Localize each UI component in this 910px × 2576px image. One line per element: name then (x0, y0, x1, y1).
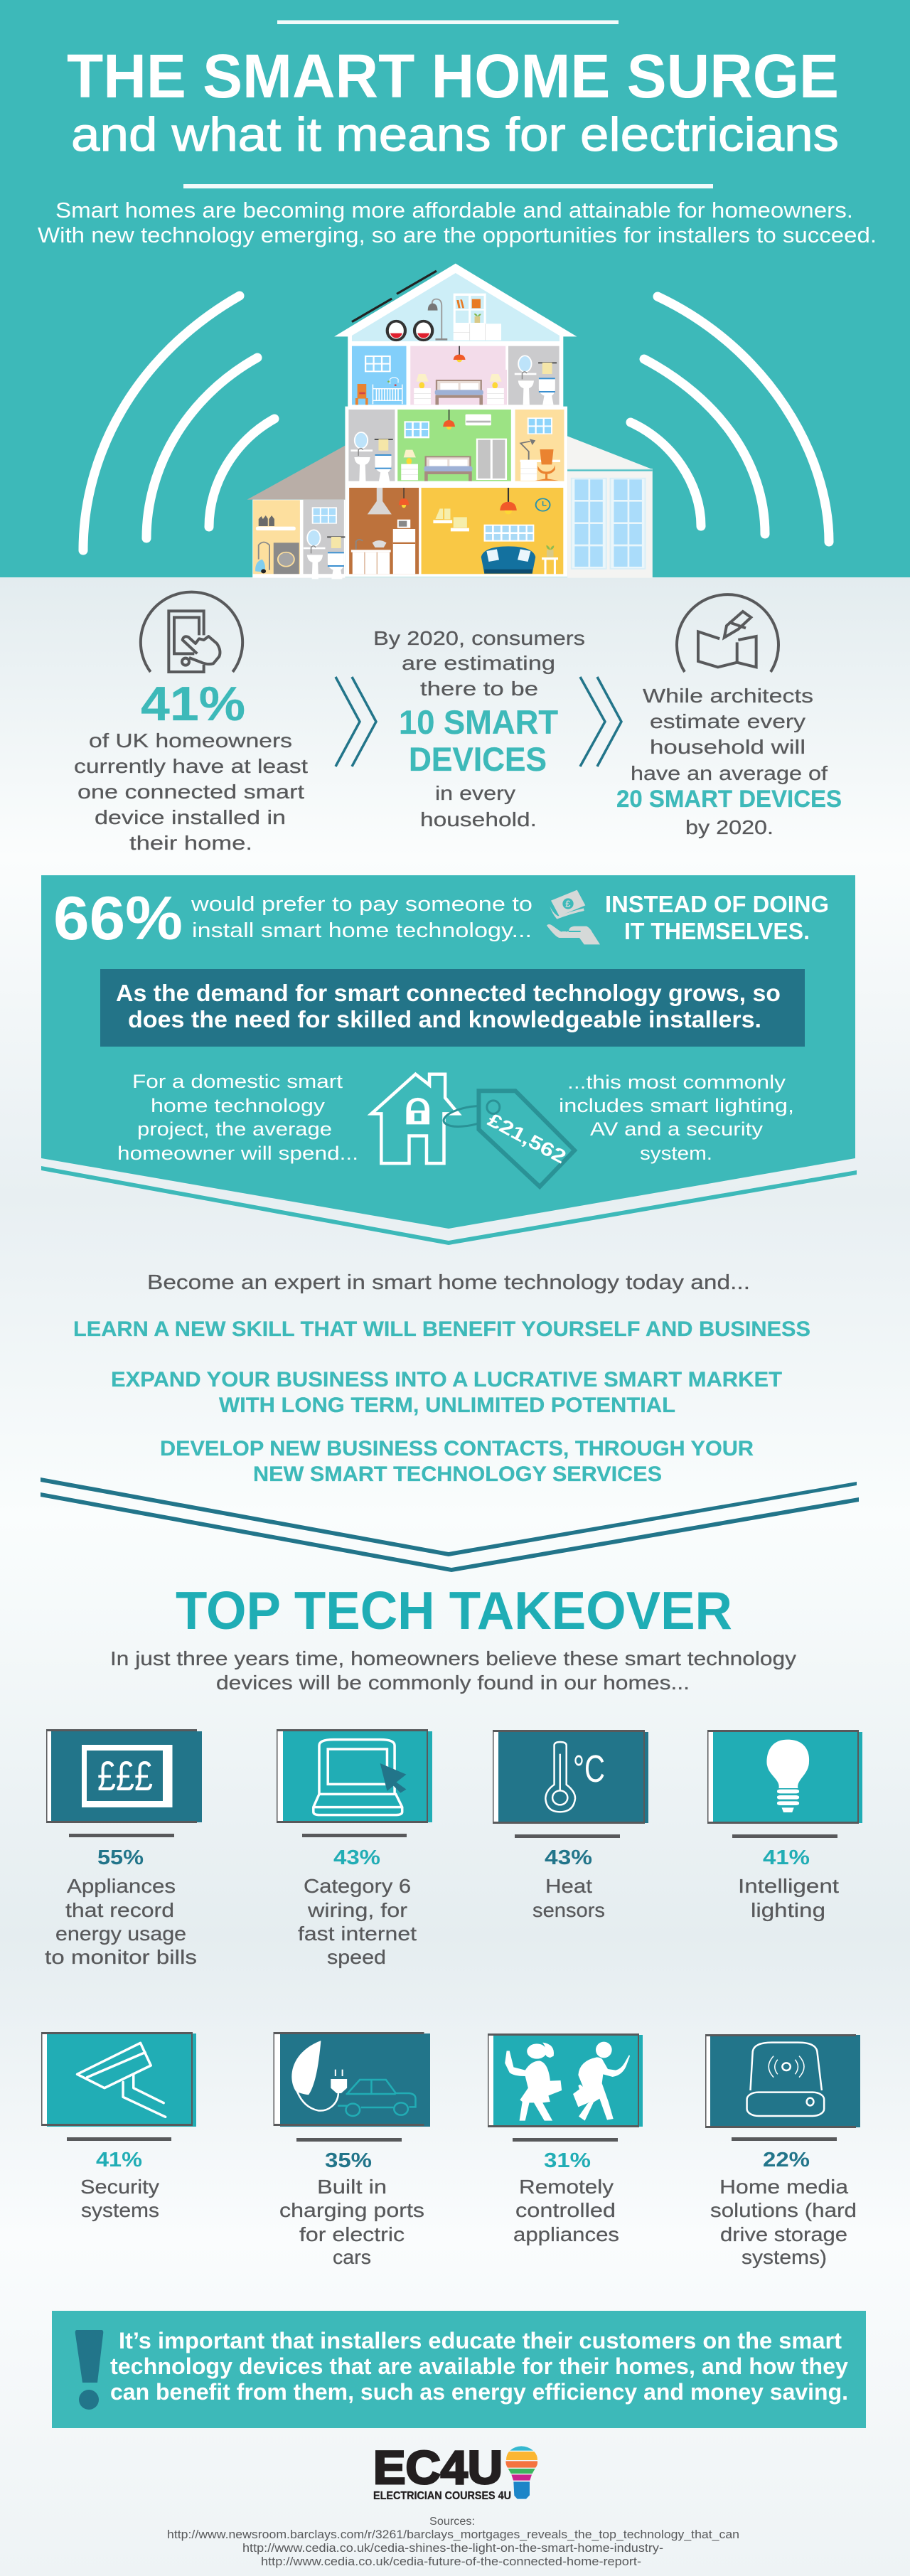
stat: 10 smart devices: there to be (420, 678, 538, 700)
card: 43 percent category 6 wiring: wiring, for (307, 1899, 407, 1921)
illustration: house cross-section (247, 264, 653, 579)
logo: EC4U (373, 2441, 537, 2502)
stat: 41 percent (74, 592, 308, 854)
panel: three statistics (74, 592, 842, 854)
benefit: develop contacts (160, 1437, 754, 1486)
card: 31 percent remotely controlled appliances: 31% (544, 2149, 591, 2172)
stat: 20 smart devices: household will (650, 736, 805, 758)
stat: 10 smart devices: are estimating (402, 652, 555, 674)
icon: money in hand: £ (565, 899, 570, 909)
card: 43 percent category 6 wiring: speed (327, 1946, 386, 1968)
text: top tech intro: devices will be commonly found in our homes... (216, 1672, 690, 1694)
arrow: chevrons one (336, 677, 376, 766)
left extension (247, 446, 345, 500)
benefit: develop contacts: DEVELOP NEW BUSINESS CONTACTS, THROUGH YOUR (160, 1437, 754, 1460)
text: average spend: homeowner will spend... (117, 1143, 358, 1164)
stat: 20 smart devices (616, 594, 842, 838)
text: most commonly includes: ...this most commonly (567, 1071, 786, 1093)
card: 43 percent category 6 wiring: Category 6 (304, 1875, 411, 1897)
benefit: develop contacts: NEW SMART TECHNOLOGY SERVICES (253, 1463, 662, 1486)
icon: light bulb (707, 1730, 862, 1824)
title: THE SMART HOME SURGE (67, 42, 839, 111)
sources: http://www.cedia.co.uk/cedia-future-of-the-connected-home-report- (261, 2555, 641, 2568)
ground floor rooms (349, 488, 419, 574)
text: callout message (110, 2328, 848, 2405)
card: 55 percent appliances: energy usage (55, 1923, 186, 1945)
icon: tablet with pounds: £££ (97, 1753, 153, 1800)
card: 43 percent category 6 wiring: 43% (333, 1847, 380, 1869)
stat: 41 percent: their home. (129, 832, 252, 854)
callout: demand for installers: As the demand for smart connected technology grows, so (116, 980, 781, 1006)
middle floor rooms (348, 410, 395, 481)
card: 41 percent intelligent lighting: Intelligent (738, 1875, 839, 1897)
card: 41 percent intelligent lighting: lighting (751, 1899, 825, 1921)
card: 31 percent remotely controlled appliances: controlled (515, 2199, 616, 2221)
icon: house with lock and price tag (371, 1074, 574, 1187)
sources: Sources: (429, 2516, 475, 2528)
icon: hard drive (705, 2034, 860, 2128)
card: 22 percent home media solutions: drive storage (720, 2223, 847, 2245)
arrow: chevrons two (580, 677, 621, 766)
card: 41 percent security systems: systems (81, 2199, 159, 2221)
text: instead of doing it themselves: INSTEAD OF DOING (605, 891, 829, 917)
signal waves left (83, 296, 274, 550)
card: 22 percent home media solutions: 22% (763, 2149, 810, 2171)
stat: 41 percent: device installed in (95, 806, 286, 828)
callout: educate customers (52, 2311, 866, 2428)
icon: thermometer (493, 1730, 648, 1824)
card: 41 percent security systems (41, 2032, 196, 2221)
card: 43 percent category 6 wiring: fast internet (298, 1923, 417, 1945)
icon: security camera (41, 2032, 196, 2127)
text: would prefer: would prefer to pay someone to (191, 893, 532, 916)
card: 41 percent security systems: 41% (96, 2149, 142, 2171)
stat: 41 percent: 41% (141, 677, 245, 731)
card: 35 percent charging ports (273, 2032, 430, 2268)
text: instead of doing it themselves: IT THEMSELVES. (624, 918, 810, 944)
icon: tablet with pounds (46, 1729, 202, 1823)
card: 41 percent security systems: Security (80, 2176, 159, 2198)
card: 22 percent home media solutions: systems) (742, 2246, 827, 2268)
card: 31 percent remotely controlled appliances (488, 2033, 643, 2245)
card: 43 percent heat sensors (493, 1730, 648, 1921)
solar panels (352, 271, 437, 322)
benefit: expand your business: EXPAND YOUR BUSINESS INTO A LUCRATIVE SMART MARKET (111, 1368, 782, 1391)
stat: 20 smart devices: by 2020. (685, 816, 774, 838)
text: lead-in: Become an expert in smart home technology today and... (147, 1271, 750, 1294)
text: most commonly includes (559, 1071, 794, 1164)
icon: money in hand (547, 890, 600, 944)
card: 41 percent intelligent lighting: 41% (763, 1847, 810, 1869)
card: 43 percent heat sensors: Heat (545, 1875, 592, 1897)
card: 55 percent appliances: that record (65, 1899, 174, 1921)
logo: EC4U: EC4U (373, 2441, 503, 2494)
card: 55 percent appliances: 55% (97, 1847, 144, 1869)
stat: 20 smart devices: have an average of (631, 762, 828, 784)
panel: installers banner (41, 875, 857, 1245)
icon: rainbow bulb (505, 2446, 537, 2499)
main body (252, 264, 577, 577)
stat: 20 smart devices: estimate every (650, 710, 805, 732)
logo: EC4U: ELECTRICIAN COURSES 4U (373, 2490, 511, 2502)
card: 55 percent appliances: Appliances (67, 1875, 176, 1897)
signal waves right (631, 296, 829, 542)
stat: 41 percent: one connected smart (77, 781, 304, 803)
benefit: expand your business (111, 1368, 782, 1417)
card: 22 percent home media solutions: solutions (hard (710, 2199, 857, 2221)
stat: 10 smart devices: By 2020, consumers (373, 627, 585, 649)
text: top tech intro (110, 1647, 796, 1694)
icon: tablet with pounds: + (164, 1770, 169, 1781)
card: 35 percent charging ports: cars (333, 2246, 371, 2268)
text: callout message: can benefit from them, such as energy efficiency and money saving. (110, 2379, 848, 2405)
icon: thermometer: °C (573, 1748, 605, 1790)
stat: 10 smart devices: household. (420, 808, 537, 830)
card: 35 percent charging ports: 35% (325, 2149, 372, 2172)
callout: demand for installers: does the need for skilled and knowledgeable installers. (128, 1006, 761, 1032)
benefit: learn a new skill: LEARN A NEW SKILL THAT WILL BENEFIT YOURSELF AND BUSINESS (73, 1318, 810, 1341)
section: become an expert (41, 1271, 859, 1572)
heading: top tech takeover: TOP TECH TAKEOVER (176, 1581, 732, 1640)
stat: 10 smart devices: 10 SMART (399, 703, 558, 741)
icon: leaf, plug and car (273, 2032, 430, 2127)
icon: two people with phones (488, 2033, 643, 2127)
stat: 41 percent: currently have at least (74, 755, 308, 777)
text: would prefer (191, 893, 532, 942)
card: 22 percent home media solutions: Home media (719, 2176, 848, 2198)
icon: map and pencil (677, 594, 778, 672)
card: 31 percent remotely controlled appliances: Remotely (519, 2176, 614, 2198)
card: 35 percent charging ports: charging ports (279, 2199, 424, 2221)
text: top tech intro: In just three years time, homeowners believe these smart technology (110, 1647, 796, 1669)
subtitle: and what it means for electricians (71, 108, 839, 161)
page background (0, 577, 910, 2576)
card: 35 percent charging ports: Built in (317, 2176, 387, 2198)
upper floor rooms (352, 346, 407, 405)
card: 35 percent charging ports: for electric (299, 2223, 405, 2245)
stat: 66 percent: 66% (53, 885, 183, 953)
callout: demand for installers (100, 969, 805, 1047)
stat: 41 percent: of UK homeowners (89, 729, 292, 752)
card: 55 percent appliances: to monitor bills (45, 1946, 197, 1968)
stat: 10 smart devices (373, 627, 585, 830)
benefit: expand your business: WITH LONG TERM, UNLIMITED POTENTIAL (219, 1394, 675, 1417)
text: average spend (117, 1071, 358, 1164)
stat: 20 smart devices: 20 SMART DEVICES (616, 786, 842, 813)
card: 55 percent appliances (45, 1729, 202, 1968)
stat: 10 smart devices: DEVICES (409, 740, 547, 778)
right extension (567, 436, 651, 469)
icon: hand tapping phone (141, 592, 242, 672)
text: average spend: project, the average (137, 1118, 332, 1140)
text: callout message: It’s important that installers educate their customers on the smart (119, 2328, 842, 2353)
stat: 20 smart devices: While architects (643, 685, 813, 707)
header panel (0, 0, 910, 577)
text: instead of doing it themselves (605, 891, 829, 944)
card: 22 percent home media solutions (705, 2034, 860, 2268)
text: callout message: technology devices that are available for their homes, and how they (110, 2353, 848, 2379)
sources: http://www.cedia.co.uk/cedia-shines-the-light-on-the-smart-home-industry- (242, 2541, 663, 2555)
sources: http://www.newsroom.barclays.com/r/3261/barclays_mortgages_reveals_the_top_technology_that_can (167, 2528, 739, 2541)
text: most commonly includes: system. (640, 1143, 712, 1164)
intro text: With new technology emerging, so are the opportunities for installers to succeed. (38, 223, 877, 247)
intro text: Smart homes are becoming more affordable and attainable for homeowners. (55, 198, 853, 223)
text: average spend: home technology (151, 1095, 326, 1116)
card: 43 percent heat sensors: sensors (532, 1899, 605, 1921)
card: 43 percent category 6 wiring (277, 1729, 432, 1968)
text: most commonly includes: AV and a security (590, 1118, 764, 1140)
card: 43 percent heat sensors: 43% (545, 1847, 592, 1869)
card: 41 percent intelligent lighting (707, 1730, 862, 1921)
attic furniture (387, 321, 405, 340)
text: average spend: For a domestic smart (132, 1071, 343, 1092)
arrow: double chevron divider (41, 1477, 859, 1572)
sources (167, 2516, 739, 2568)
text: would prefer: install smart home technology... (192, 919, 532, 942)
text: most commonly includes: includes smart lighting, (559, 1095, 794, 1116)
stat: 10 smart devices: in every (435, 782, 515, 804)
card: 31 percent remotely controlled appliances: appliances (513, 2223, 619, 2245)
icon: laptop with cursor (277, 1729, 432, 1823)
intro text (38, 198, 877, 247)
icon: house with lock and price tag: £21,562 (484, 1109, 569, 1167)
icon: exclamation mark (75, 2330, 103, 2410)
